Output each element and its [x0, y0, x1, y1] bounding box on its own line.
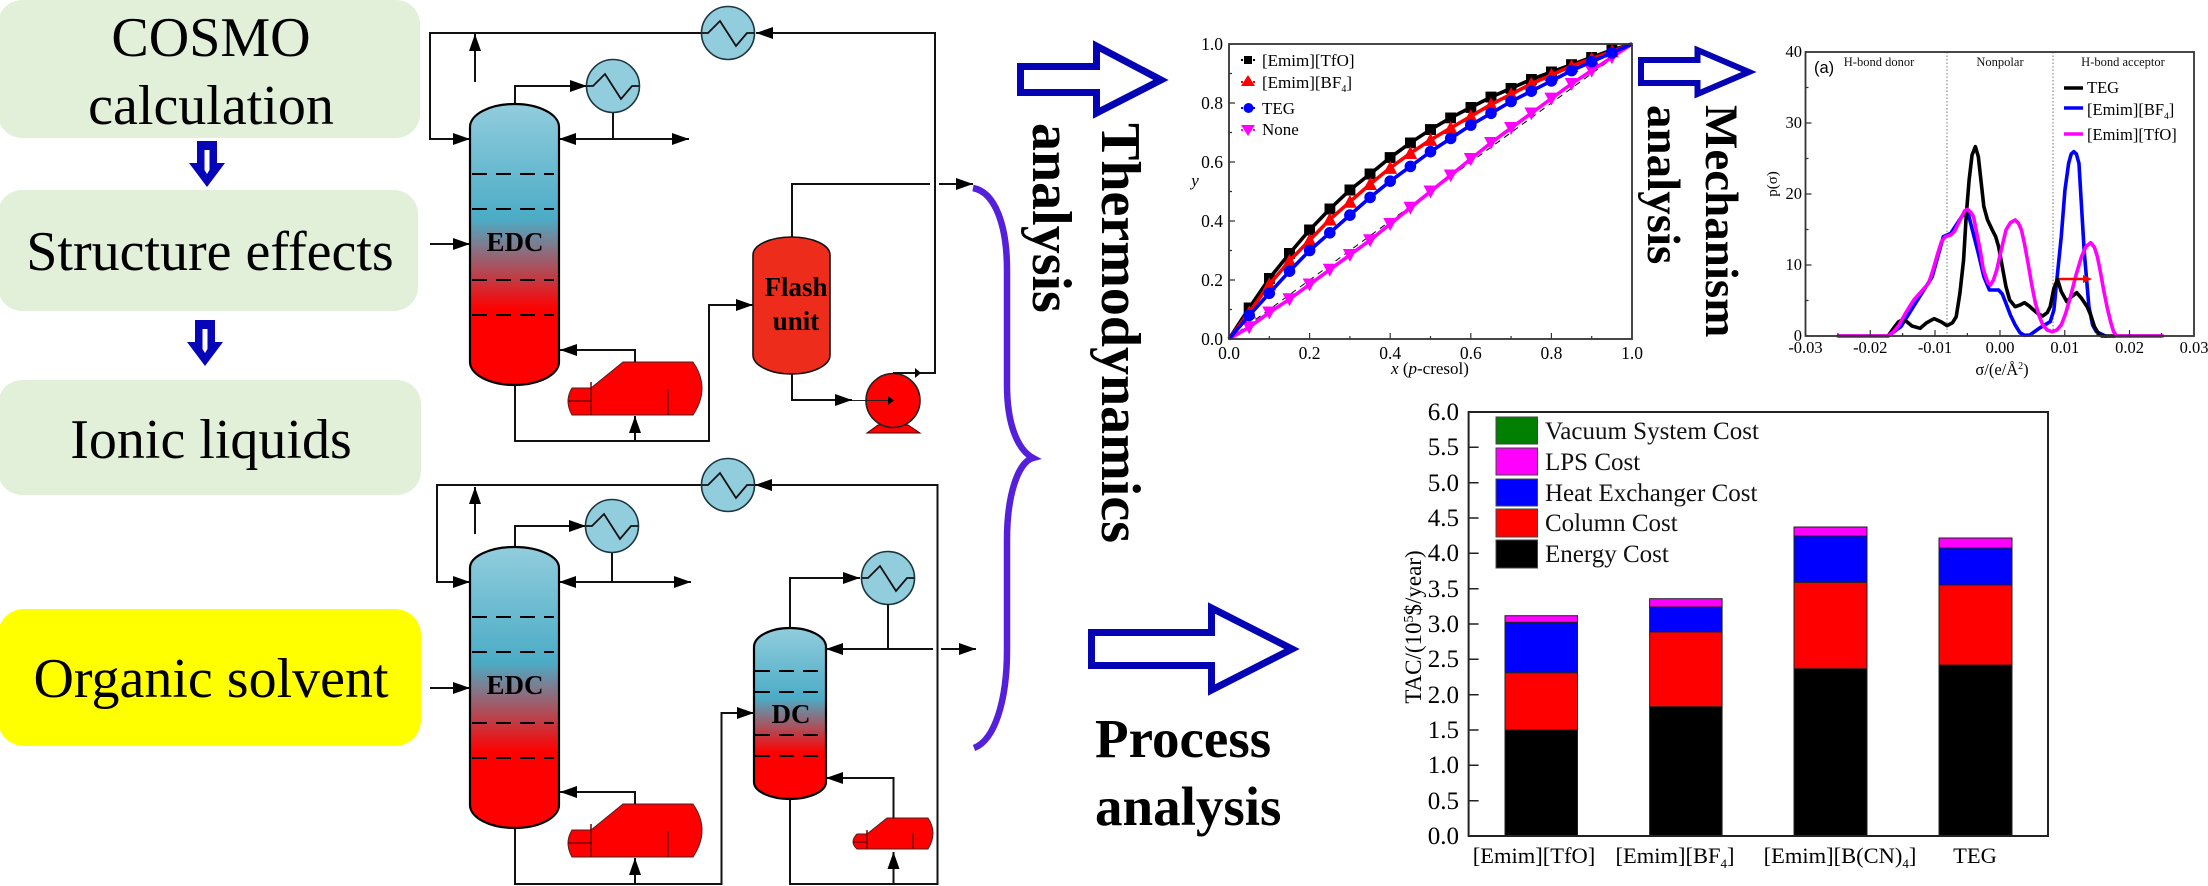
bottoms to DC [515, 713, 754, 884]
arrow: thermodynamics [1020, 46, 1161, 113]
y axis labels: 20 [1786, 184, 1802, 203]
y axis labels [1201, 34, 1223, 349]
reboiler return [560, 792, 635, 804]
legend: Heat Exchanger Cost [1545, 480, 1757, 507]
y axis labels: 5.5 [1428, 434, 1459, 461]
y axis labels: 1.0 [1428, 752, 1459, 779]
EDC column: EDC [486, 670, 544, 700]
bottoms to flash unit [515, 305, 753, 441]
heading: Thermodynamics analysis: analysis [1020, 123, 1082, 313]
flash bottoms to pump [792, 374, 852, 400]
y axis labels: 4.5 [1428, 505, 1459, 532]
category labels [1473, 843, 1997, 871]
region labels: Nonpolar [1976, 55, 2024, 69]
x axis labels [1788, 338, 2208, 357]
flash unit: unit [773, 306, 819, 336]
box: Organic solvent: Organic solvent [33, 648, 389, 710]
legend: [Emim][TfO] [2087, 125, 2177, 144]
bar: [Emim][B(CN)4] [1794, 527, 1867, 836]
DC condenser [862, 552, 914, 604]
legend [1241, 51, 1355, 139]
DC reboiler return [826, 778, 894, 818]
legend: None [1262, 120, 1299, 139]
region labels: H-bond donor [1844, 55, 1915, 69]
distillate line [612, 581, 691, 583]
box: COSMO calculation [0, 0, 420, 138]
y axis labels: 1.0 [1201, 34, 1223, 54]
distillate line [613, 138, 689, 140]
EDC column [470, 547, 559, 828]
category labels: [Emim][BF [1616, 843, 1720, 868]
y axis labels: 3.0 [1428, 611, 1459, 638]
category labels: ] [1727, 843, 1734, 868]
EDC column: EDC [486, 227, 544, 257]
legend: TEG [2087, 78, 2119, 97]
y axis labels [1428, 399, 1459, 850]
x axis labels: 0.4 [1379, 343, 1401, 363]
legend: LPS Cost [1545, 449, 1640, 476]
curve: [Emim][TfO] [1838, 209, 2163, 336]
legend: Vacuum System Cost [1545, 418, 1759, 445]
legend: ] [2169, 100, 2174, 119]
legend: [Emim][BF [2087, 100, 2164, 119]
reboiler inlet [634, 858, 636, 884]
panel: workflow steps [0, 0, 421, 746]
curves [1838, 147, 2163, 336]
category labels: [Emim][TfO] [1473, 843, 1595, 868]
y axis labels: 3.5 [1428, 576, 1459, 603]
box: Ionic liquids [0, 380, 421, 495]
condenser [586, 500, 638, 552]
reflux line [559, 553, 612, 582]
x axis labels: 0.02 [2115, 338, 2144, 357]
reboiler inlet [634, 416, 636, 441]
y axis labels: 0.8 [1201, 93, 1223, 113]
legend [2064, 78, 2177, 144]
x axis title: 2 [2018, 361, 2023, 372]
category labels: TEG [1953, 843, 1997, 868]
EDC feed arrow [430, 687, 470, 689]
legend: ] [1346, 73, 1352, 92]
DC column [754, 628, 826, 799]
shift arrow [2059, 275, 2092, 283]
chart: sigma profile [1765, 42, 2208, 379]
x axis labels: 0.0 [1218, 343, 1240, 363]
brace [973, 188, 1033, 748]
y axis title: y [1189, 171, 1199, 190]
white slits inside down arrows [202, 150, 210, 353]
overhead line [515, 526, 586, 547]
heading: Process analysis [1095, 708, 1281, 837]
DC reboiler inlet [892, 852, 894, 884]
series: None [1229, 44, 1632, 339]
y axis labels: 2.5 [1428, 646, 1459, 673]
y axis title: 5 [1402, 615, 1417, 622]
recycle cooler [702, 6, 754, 60]
y axis labels: 0.5 [1428, 788, 1459, 815]
x axis labels: 0.2 [1299, 343, 1321, 363]
legend [1496, 417, 1759, 568]
legend: 4 [2164, 112, 2169, 122]
reboiler return [560, 350, 635, 362]
x axis labels: 0.01 [2050, 338, 2079, 357]
x axis title: σ/(e/Å [1975, 360, 2018, 379]
bar: [Emim][TfO] [1505, 616, 1578, 836]
overhead line [515, 86, 587, 104]
y axis title: $/year) [1401, 550, 1426, 615]
condenser [586, 60, 640, 112]
recycle line [430, 33, 702, 139]
box: Structure effects [0, 190, 418, 311]
y axis labels: 2.0 [1428, 682, 1459, 709]
y axis labels: 0.4 [1201, 211, 1223, 231]
reboiler [568, 362, 702, 415]
flash vapour line [792, 184, 973, 237]
EDC feed arrow [430, 243, 470, 245]
region dividers [1947, 52, 2053, 336]
EDC column [470, 104, 559, 385]
heading: Thermodynamics analysis [1020, 123, 1151, 543]
x axis labels: 0.03 [2180, 338, 2208, 357]
legend: [Emim][TfO] [1262, 51, 1355, 70]
bar: [Emim][BF4] [1650, 599, 1722, 836]
arrow: process [1092, 608, 1292, 690]
frame and ticks [1806, 52, 2194, 336]
legend: Energy Cost [1545, 541, 1669, 568]
legend: 4 [1341, 84, 1346, 95]
box: Structure effects: Structure effects [26, 221, 394, 283]
DC overhead [790, 578, 860, 628]
x axis labels: -0.02 [1853, 338, 1887, 357]
category labels: [Emim][B(CN) [1764, 843, 1902, 868]
DC column: DC [772, 699, 810, 729]
y axis labels: 5.0 [1428, 470, 1459, 497]
x axis labels: 0.00 [1986, 338, 2014, 357]
y axis labels: 0.0 [1428, 823, 1459, 850]
x axis title: x (p-cresol) [1390, 359, 1469, 378]
y axis labels: 0.0 [1201, 329, 1223, 349]
legend: [Emim][BF [1262, 73, 1341, 92]
x axis labels: -0.01 [1918, 338, 1952, 357]
x axis labels: 0.8 [1540, 343, 1563, 363]
curve: [Emim][BF4] [1888, 152, 2105, 336]
legend: Column Cost [1545, 510, 1678, 537]
flash unit [753, 237, 830, 374]
category labels: 4 [1902, 856, 1909, 871]
frame and ticks [1469, 412, 2048, 836]
curve: TEG [1838, 147, 2161, 336]
diagonal reference [1229, 44, 1632, 339]
region labels: H-bond acceptor [2081, 55, 2166, 69]
x axis labels: 0.6 [1460, 343, 1482, 363]
pump discharge [756, 33, 935, 378]
panel: organic solvent process flowsheet [430, 458, 976, 884]
reboiler [568, 804, 702, 857]
pump [852, 374, 920, 433]
flash unit: Flash [764, 272, 828, 302]
arrow: structure effects to ionic liquids [187, 320, 223, 366]
y axis labels: 0.6 [1201, 152, 1223, 172]
category labels: 4 [1720, 856, 1728, 871]
series: [Emim][BF4] [1229, 44, 1632, 339]
makeup arrow [474, 487, 476, 534]
reflux line [559, 112, 613, 139]
heading: Thermodynamics analysis: Thermodynamics [1089, 123, 1151, 543]
DC distillate line [888, 648, 976, 650]
x axis labels: -0.03 [1788, 338, 1823, 357]
DC reboiler [853, 818, 933, 849]
box: COSMO calculation: calculation [88, 75, 334, 137]
arrow: COSMO to structure effects [189, 141, 225, 187]
y axis labels: 6.0 [1428, 399, 1459, 426]
x axis labels: 1.0 [1621, 343, 1643, 363]
recycle cooler [702, 458, 754, 512]
y axis title: TAC/(10 [1401, 622, 1426, 704]
panel tag: (a) [1814, 59, 1834, 77]
y axis labels: 4.0 [1428, 540, 1459, 567]
region labels [1844, 55, 2166, 69]
y axis title: p(σ) [1765, 171, 1781, 197]
y axis labels [1786, 42, 1802, 345]
box: Ionic liquids: Ionic liquids [70, 409, 352, 471]
box: Organic solvent [0, 609, 421, 746]
frame and ticks [1229, 44, 1632, 339]
box: COSMO calculation: COSMO [111, 7, 311, 69]
series: TEG [1229, 44, 1632, 339]
heading: Mechanism analysis [1637, 105, 1747, 337]
y axis labels: 0.2 [1201, 270, 1223, 290]
category labels: ] [1909, 843, 1916, 868]
chart: vapour-liquid equilibrium [1189, 34, 1643, 378]
bar: TEG [1939, 538, 2012, 836]
heading: Mechanism analysis: analysis [1637, 105, 1689, 264]
x axis title: ) [2023, 360, 2029, 379]
arrow: mechanism [1641, 50, 1749, 94]
x axis labels [1218, 343, 1643, 363]
y axis labels: 30 [1786, 113, 1802, 132]
legend: TEG [1262, 99, 1295, 118]
y axis labels: 40 [1786, 42, 1802, 61]
y axis labels: 0 [1794, 326, 1802, 345]
heading: Mechanism analysis: Mechanism [1695, 105, 1747, 337]
heading: Process analysis: Process [1095, 708, 1271, 769]
series: [Emim][TfO] [1229, 44, 1632, 339]
DC bottoms recycle [755, 485, 938, 884]
panel: ionic liquid process flowsheet [430, 6, 973, 441]
y axis labels: 10 [1786, 255, 1802, 274]
recycle line [437, 485, 702, 582]
y axis labels: 1.5 [1428, 717, 1459, 744]
chart: TAC stacked bars [1401, 399, 2048, 871]
makeup arrow [474, 34, 476, 82]
DC reflux line [826, 604, 888, 649]
heading: Process analysis: analysis [1095, 776, 1281, 837]
